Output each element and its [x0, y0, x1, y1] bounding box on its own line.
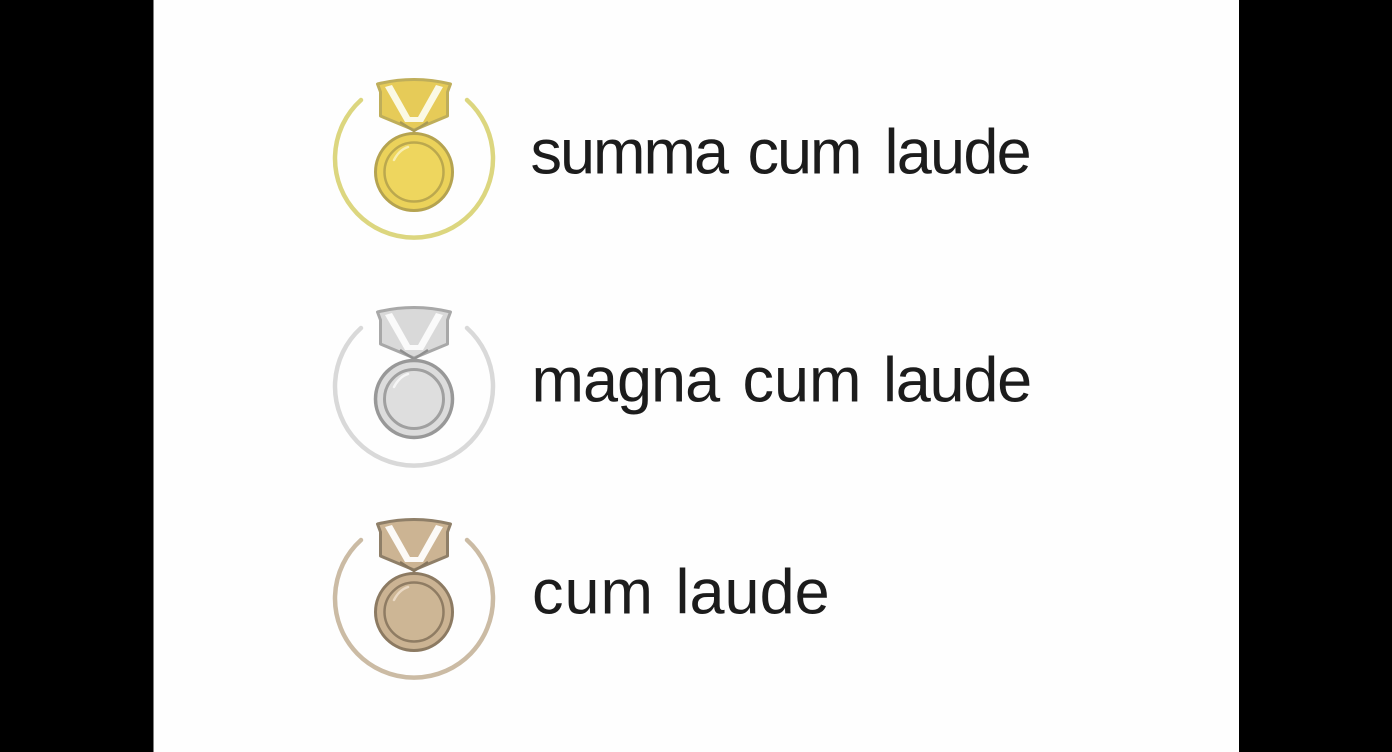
label: summa cum laude: summa: [530, 118, 730, 188]
icon: bronze medal: [335, 520, 493, 678]
row: magna cum laude: [335, 308, 1031, 466]
white panel: [154, 0, 1239, 752]
row: cum laude: [335, 520, 830, 678]
label: magna cum laude: laude: [883, 346, 1031, 416]
icon: gold medal: [335, 80, 493, 238]
label: magna cum laude: magna: [532, 346, 721, 416]
icon: silver medal: [335, 308, 493, 466]
label: summa cum laude: cum: [748, 118, 861, 188]
label: cum laude: cum: [532, 557, 654, 627]
label: magna cum laude: cum: [742, 346, 862, 416]
row: summa cum laude: [335, 80, 1030, 238]
label: summa cum laude: laude: [884, 118, 1030, 188]
label: cum laude: laude: [676, 557, 830, 627]
